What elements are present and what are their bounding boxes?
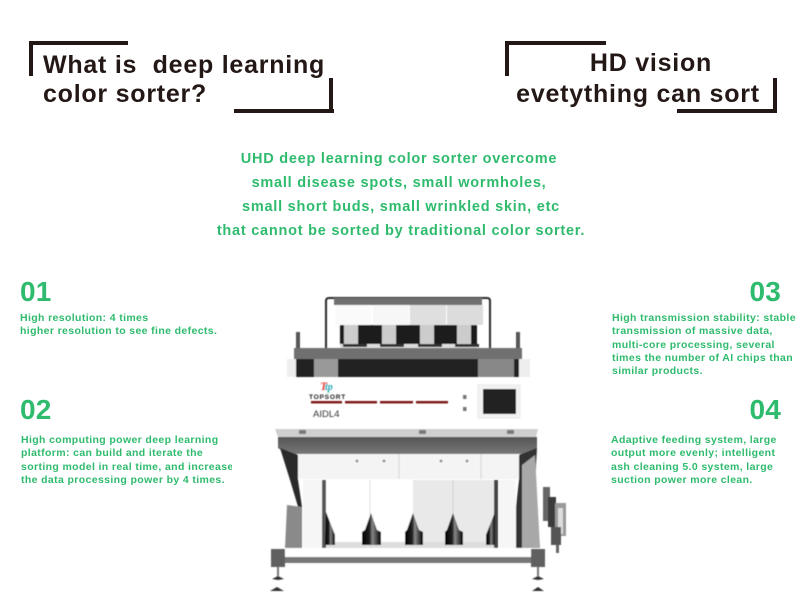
feature 01: 01 [20,276,52,307]
feature 02 [20,395,232,486]
feature 01: High resolution: 4 times higher resolution to see fine defects. [20,312,217,337]
switches [463,395,466,411]
grey cross bar [294,348,522,359]
feature 04 [611,394,781,486]
lower white door [298,454,519,479]
upper hopper frame [296,298,520,348]
dark channel section [287,359,530,377]
feature 01 [20,276,217,337]
feature 03: High transmission stability: stable transmission of massive data, multi-core processing, several times the number of AI chips than similar products. [612,312,796,377]
feature 03 [612,276,796,377]
logo: Topsort: TOPSORT [309,394,346,401]
intro text: UHD deep learning color sorter overcome small disease spots, small wormholes, small short buds, small wrinkled skin, etc that cannot be sorted by traditional color sorter. [217,151,585,239]
chute panels [326,480,494,548]
base frame [271,548,545,567]
touch screen [478,385,520,418]
model label: AIDL4 [313,409,339,420]
logo: Topsort: T [320,379,328,393]
lower body top cover [275,429,538,454]
adjustable feet [270,567,544,591]
feature 02: High computing power deep learning platform: can build and iterate the sorting model in real time, and increase the data processing power by 4 times. [21,434,232,486]
logo: Topsort: tp [325,382,333,393]
red indicator bars [311,401,448,403]
pneumatic valve [543,487,566,553]
outlet cones [325,512,495,545]
feature 04: Adaptive feeding system, large output more evenly; intelligent ash cleaning 5.0 system, large suction power more clean. [611,434,777,486]
side walls [280,448,540,548]
heading: what is deep learning color sorter: What is deep learning color sorter? [43,51,325,108]
logo: Topsort [309,379,346,401]
feature 04: 04 [749,394,781,425]
white pillars [303,480,516,548]
feature 03: 03 [749,276,781,307]
heading: HD vision everything can sort: HD vision evetything can sort [516,49,760,108]
